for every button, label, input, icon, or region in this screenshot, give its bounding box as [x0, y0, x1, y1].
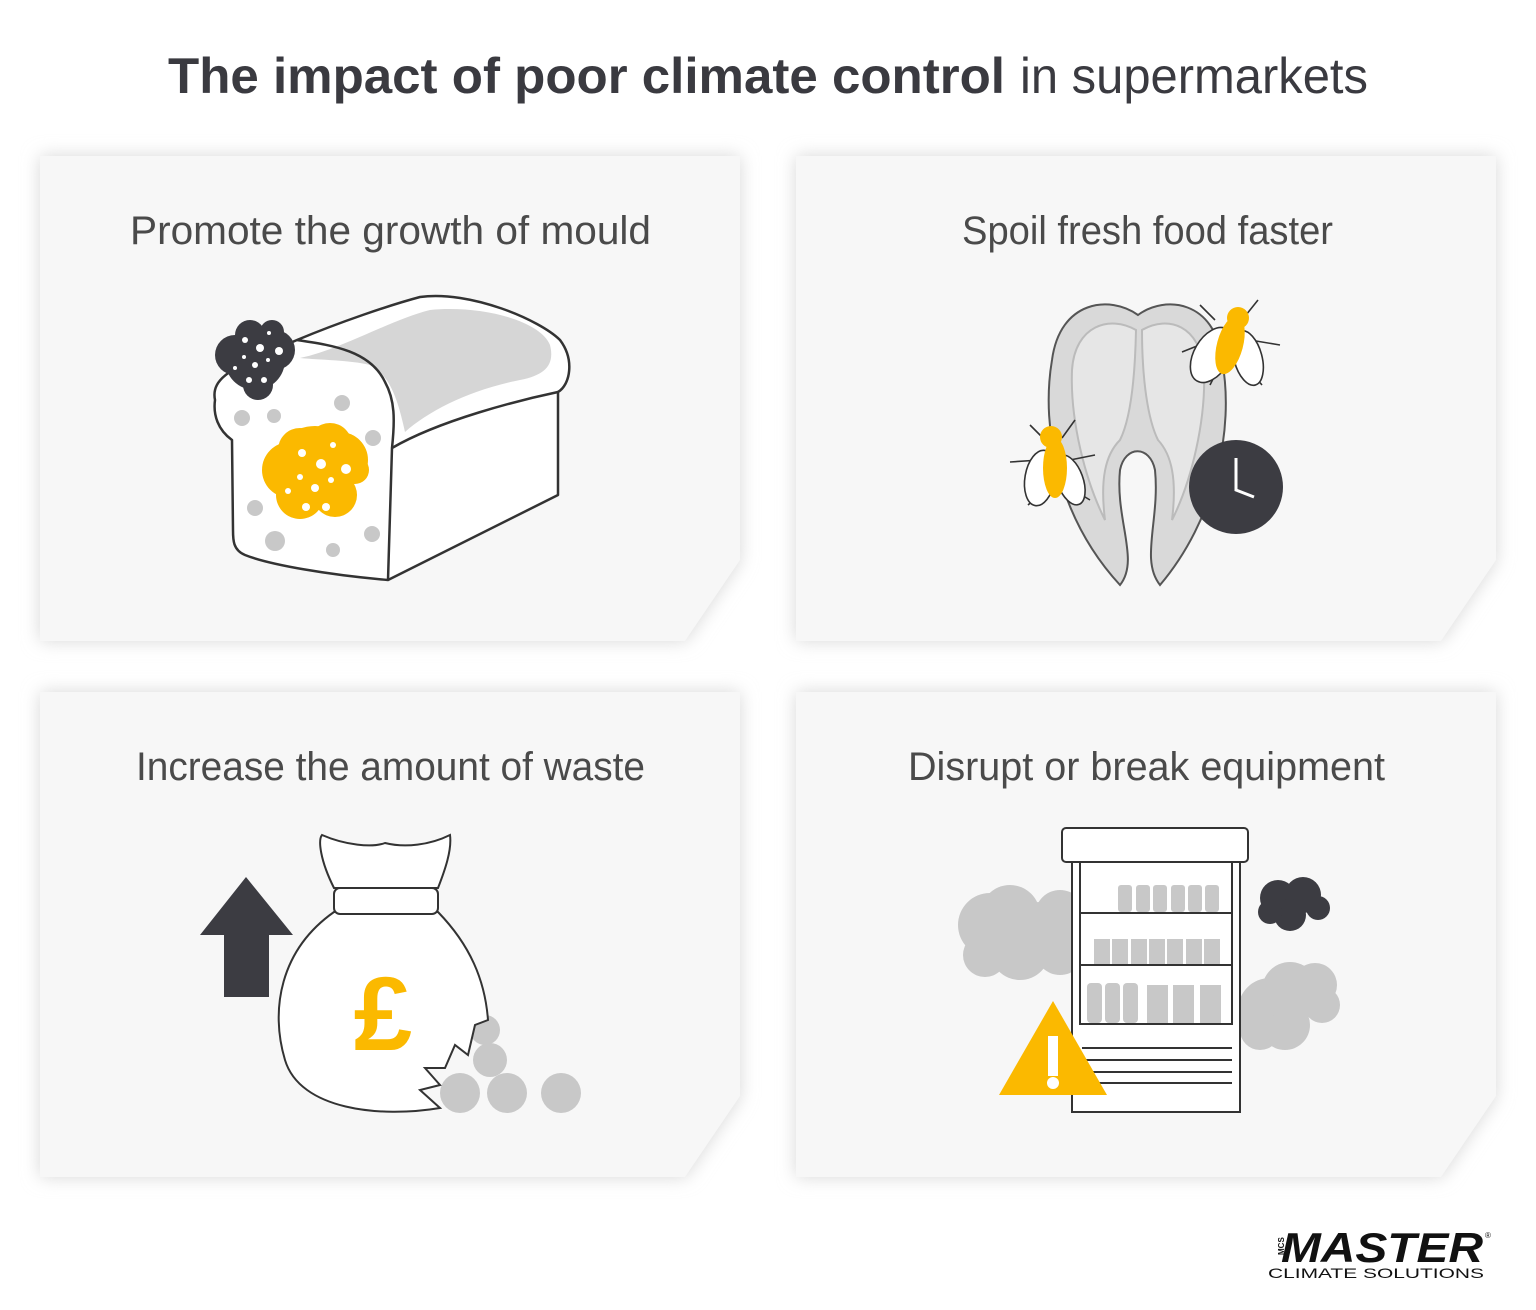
logo: MASTER: [1281, 1224, 1484, 1271]
icon: warning: [999, 1001, 1107, 1095]
title: [168, 48, 1368, 104]
icon: up arrow: [200, 877, 293, 997]
icon: clock: [1189, 440, 1283, 534]
icon: fly 2: [1010, 420, 1095, 509]
heading: waste: Increase the amount of waste: [136, 745, 645, 789]
logo: ®: [1485, 1231, 1491, 1240]
icon: clouds: [958, 885, 1340, 1050]
logo: CLIMATE SOLUTIONS: [1268, 1265, 1484, 1281]
icon: fridge: [1062, 828, 1248, 1112]
title: in supermarkets: [1020, 48, 1368, 104]
icon: money bag: [279, 835, 581, 1113]
heading: equipment: Disrupt or break equipment: [908, 745, 1385, 789]
panel: mould: [40, 156, 740, 641]
heading: mould: Promote the growth of mould: [130, 209, 651, 253]
panel: waste: [40, 692, 740, 1177]
logo: MCS: [1277, 1237, 1286, 1255]
icon: mouldy bread: [214, 296, 569, 580]
panel: spoil: [796, 156, 1496, 641]
icon: fly 1: [1181, 300, 1280, 390]
heading: spoil: Spoil fresh food faster: [962, 209, 1333, 253]
title: The impact of poor climate control: [168, 48, 1005, 104]
logo: [1268, 1224, 1491, 1281]
icon: fish steak: [1049, 304, 1226, 585]
panel: equipment: [796, 692, 1496, 1177]
icon: money bag: £: [354, 956, 412, 1073]
